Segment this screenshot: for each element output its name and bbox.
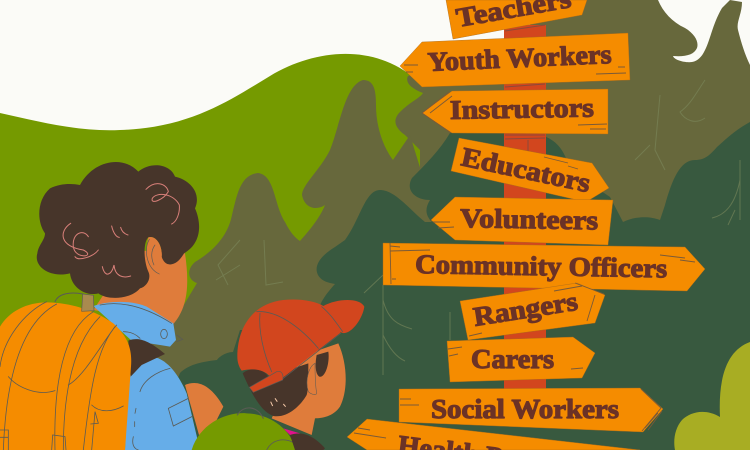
sign: Social Workers (399, 388, 663, 432)
sign: Carers: Carers (471, 344, 554, 374)
sign: Carers (447, 337, 595, 382)
sign: Volunteers: Volunteers (460, 203, 598, 235)
sign: Community Officers: Community Officers (415, 249, 667, 283)
big olive tree right (395, 0, 750, 450)
child 1 hair (37, 162, 199, 298)
child 1 jacket (93, 302, 200, 450)
sign: Educators (451, 138, 609, 202)
olive tree centre (150, 80, 430, 400)
sign: Rangers: Rangers (471, 286, 580, 332)
child 2 green backpack (192, 408, 295, 450)
sign: Rangers (460, 283, 605, 340)
child 1 backpack (0, 293, 131, 450)
green hill (0, 54, 440, 450)
child 2 hair (243, 352, 329, 416)
sign: Instructors (422, 89, 608, 134)
child 2 red cap (237, 299, 364, 392)
child 2 shoulder strap and shirt (283, 428, 325, 450)
sign: Health Professionals (347, 419, 643, 450)
sign: Youth Workers: Youth Workers (427, 39, 612, 77)
child 1 hand (185, 383, 223, 435)
hiker children (0, 162, 364, 450)
sign: Social Workers: Social Workers (431, 394, 619, 424)
tree branch lines (216, 80, 740, 375)
sign: Youth Workers (400, 33, 630, 87)
child 1 neck and face (93, 250, 187, 324)
light olive bush (674, 342, 750, 450)
sign: Educators: Educators (459, 142, 593, 198)
sign: Community Officers (383, 243, 705, 291)
sign: Instructors: Instructors (450, 92, 594, 125)
sign: Teachers (446, 0, 587, 39)
dark green forest (150, 122, 750, 450)
sign: Volunteers (431, 197, 613, 245)
signpost pole (504, 25, 546, 417)
child 2 face (272, 343, 346, 435)
